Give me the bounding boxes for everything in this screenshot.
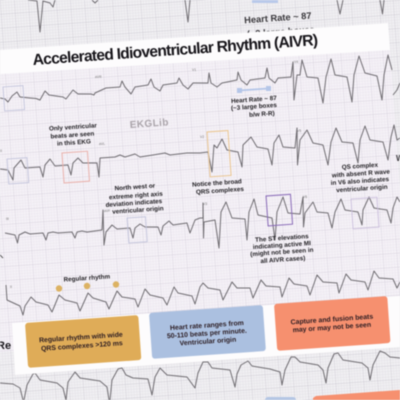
ECG row 2 [0, 125, 400, 180]
lead labels: aVR [95, 75, 102, 79]
annotation box: lead I beat [3, 86, 25, 111]
note: axis deviation: deviation indicates [105, 198, 163, 209]
card: heart rate [149, 305, 266, 359]
note: only ventricular beats: in this EKG [57, 138, 91, 148]
note: ST elevation: The ST elevations [255, 233, 309, 244]
panel: summary band [12, 296, 400, 375]
regular rhythm markers [56, 281, 119, 292]
lead labels: aVF [104, 209, 110, 213]
lead labels [0, 60, 307, 289]
ECG strips behind the card at top [28, 0, 384, 32]
lead labels: III [6, 217, 9, 221]
note: broad QRS [192, 178, 245, 196]
annotation box: lead II beat [7, 158, 29, 184]
note: heart rate: (~3 large boxes [231, 102, 278, 112]
title: Accelerated Idioventricular Rhythm (AIVR) [32, 32, 319, 69]
card: heart rate: Ventricular origin [179, 337, 236, 347]
note: broad QRS: QRS complexes [196, 186, 245, 196]
lead labels: V2 [200, 135, 204, 139]
ECG row 1 [0, 55, 392, 103]
annotation box: ST elevation [266, 194, 293, 226]
note: ST elevation: indicating active MI [253, 240, 311, 251]
lead labels: V4 [294, 60, 298, 64]
annotation box: lead III beat [127, 217, 147, 243]
note: ST elevation: (might not be seen in [250, 247, 314, 258]
note: only ventricular beats: beats are seen [50, 130, 95, 140]
note: heart rate [231, 95, 278, 119]
note: ST elevation [250, 233, 314, 265]
heart rate note at top: Heart Rate ~ 87 [244, 11, 312, 25]
note: heart rate: Heart Rate ~ 87 [231, 95, 277, 105]
heart rate note at top: (~3 large boxes [247, 24, 315, 39]
card: regular rhythm: QRS complexes >120 ms [41, 340, 123, 353]
note: QS complex: ventricular origin [336, 184, 388, 194]
note: axis deviation: North west or [114, 183, 156, 192]
note: axis deviation: extreme right axis [109, 191, 164, 201]
card: heart rate: Heart rate ranges from [170, 320, 244, 332]
note: broad QRS: Notice the broad [192, 178, 242, 189]
left edge fragments [0, 255, 11, 352]
ECG row 4 rhythm strip [6, 271, 400, 315]
card: regular rhythm: Regular rhythm with wide [39, 332, 123, 344]
card: capture and fusion [274, 296, 391, 351]
next-slide card fragments [265, 390, 400, 400]
card: heart rate: 50-110 beats per minute. [167, 328, 247, 340]
lead labels: V3 [203, 202, 207, 206]
note: QS complex [330, 162, 391, 194]
lead labels: aVL [99, 142, 105, 146]
annotation box: QS complex [351, 197, 379, 229]
note: regular rhythm: Regular rhythm [63, 273, 111, 284]
annotation box: broad QRS [207, 131, 231, 177]
annotation box: ventricular beat [62, 151, 90, 183]
note: axis deviation: ventricular origin [112, 205, 164, 216]
ECG row 3 [5, 197, 400, 248]
lead labels: II [0, 149, 2, 153]
note: QS complex: in V6 also indicates [330, 176, 390, 187]
note: only ventricular beats [49, 122, 98, 148]
watermark: EKGLib [129, 117, 169, 131]
card: regular rhythm [25, 315, 141, 368]
right edge fragments [393, 83, 400, 163]
heart rate note at top [242, 0, 315, 39]
panel: ECG card [0, 50, 400, 352]
note: ST elevation: all AIVR cases) [260, 255, 306, 265]
note: axis deviation [105, 183, 164, 216]
lead labels: V5 [297, 129, 301, 133]
ECG row 5 below the card [0, 351, 400, 400]
card: capture and fusion: Capture and fusion beats [290, 314, 374, 326]
note: QS complex: with absent R wave [331, 168, 391, 180]
lead labels: V6 [303, 195, 307, 199]
lead labels: II [10, 285, 12, 289]
note: only ventricular beats: Only ventricular [49, 122, 98, 133]
lead labels: V1 [192, 68, 196, 72]
title bar [0, 23, 390, 74]
card: capture and fusion: may or may not be seen [293, 322, 371, 334]
note: heart rate: b/w R-R) [249, 110, 275, 119]
heart rate bracket [237, 86, 271, 93]
note: QS complex: QS complex [341, 162, 379, 171]
